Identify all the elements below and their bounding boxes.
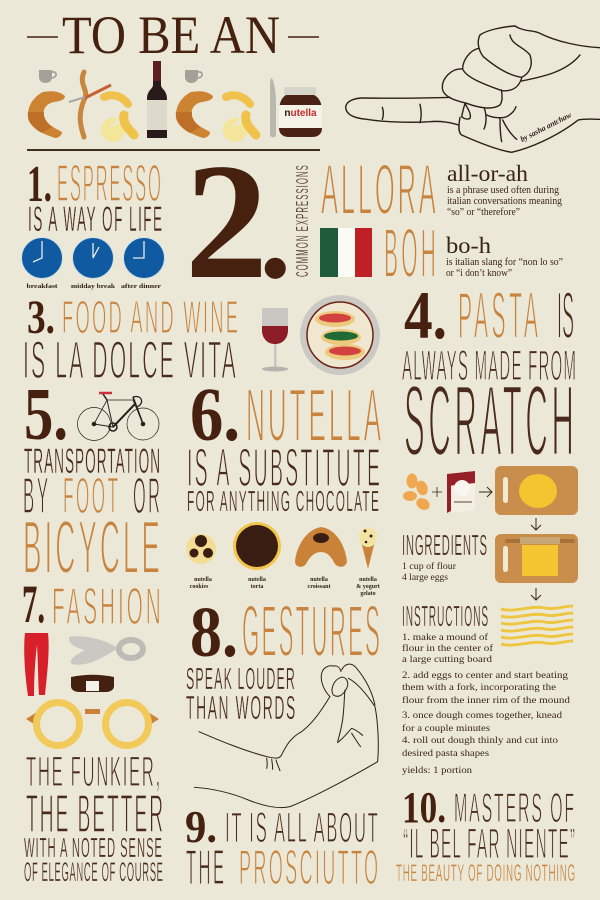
section 2: common expressions: is a phrase used often during bbox=[447, 185, 559, 196]
section 10: il bel far niente: “IL BEL FAR NIENTE” bbox=[403, 819, 575, 867]
icon: nutella torta bbox=[233, 522, 281, 570]
food row illustration: nutella bbox=[284, 108, 317, 119]
icon: cutting board with flour bbox=[495, 466, 578, 515]
icon: italian flag bbox=[320, 228, 372, 277]
section 2: common expressions: “so” or “therefore” bbox=[447, 207, 520, 218]
nutella labels: nutella bbox=[359, 577, 377, 583]
section 2: common expressions: ALLORA bbox=[321, 151, 436, 230]
nutella labels: gelato bbox=[360, 591, 376, 597]
clock labels: midday break bbox=[71, 284, 116, 290]
icon: nutella croissant bbox=[295, 527, 347, 567]
clock labels: after dinner bbox=[121, 284, 161, 290]
section 8: gestures: GESTURES bbox=[242, 593, 380, 672]
section 8: gestures: THAN WORDS bbox=[186, 690, 295, 727]
icon: pointing hand line drawing bbox=[346, 26, 600, 152]
section 8: gestures: 8. bbox=[190, 592, 238, 672]
instructions: desired pasta shapes bbox=[402, 749, 489, 759]
arrow: down to noodles bbox=[531, 588, 541, 600]
section 2: common expressions: BOH bbox=[384, 213, 436, 292]
section 2: common expressions: is italian slang for “non lo so” bbox=[446, 257, 563, 268]
section 6: nutella: 6. bbox=[190, 373, 240, 457]
section 6: nutella: IS A SUBSTITUTE bbox=[187, 437, 380, 498]
section 2: common expressions: COMMON EXPRESSIONS bbox=[291, 165, 312, 277]
section 7: fashion bbox=[22, 574, 163, 888]
nutella labels: nutella bbox=[194, 577, 212, 583]
section 3: food and wine bbox=[23, 291, 380, 390]
icon: wine glass bbox=[262, 308, 288, 372]
nutella labels: cookies bbox=[190, 584, 209, 590]
section 6: nutella: NUTELLA bbox=[246, 373, 381, 457]
icon: plus bbox=[432, 487, 442, 497]
section 5: transportation: BY bbox=[23, 469, 48, 525]
ingredients: 1 cup of flour bbox=[402, 561, 457, 572]
section 10: il bel far niente: 10. bbox=[402, 783, 446, 832]
section 2: common expressions: . bbox=[259, 162, 292, 306]
section 4: pasta: 4. bbox=[404, 277, 447, 353]
section 2: common expressions: or “i don’t know” bbox=[446, 268, 512, 279]
ingredients: INGREDIENTS bbox=[402, 529, 487, 562]
instructions: 3. once dough comes together, knead bbox=[402, 711, 562, 721]
icon: grey scarf bbox=[69, 636, 143, 665]
icon: cutting board with dough bbox=[495, 534, 578, 583]
instructions: yields: 1 portion bbox=[402, 766, 472, 776]
section 3: food and wine: FOOD AND WINE bbox=[62, 292, 238, 344]
instructions: 4. roll out dough thinly and cut into bbox=[402, 736, 558, 746]
section 2: common expressions: all-or-ah bbox=[447, 161, 529, 186]
section 7: fashion: THE BETTER bbox=[26, 783, 163, 844]
icon: yellow glasses bbox=[26, 702, 159, 746]
section 5: transportation: BICYCLE bbox=[23, 505, 160, 589]
nutella labels: nutella bbox=[310, 577, 328, 583]
icon: nutella cookies bbox=[186, 534, 216, 564]
ingredients: 4 large eggs bbox=[402, 573, 448, 583]
icon: noodles bbox=[501, 606, 573, 645]
section 5: transportation: OR bbox=[133, 469, 160, 525]
instructions: flour from the inner rim of the mound bbox=[402, 695, 570, 706]
instructions: 1. make a mound of bbox=[402, 632, 489, 643]
icon: flour bag bbox=[447, 471, 475, 513]
icon: after dinner clock bbox=[124, 238, 164, 278]
instructions: 2. add eggs to center and start beating bbox=[402, 671, 568, 681]
section 2: common expressions: bo-h bbox=[446, 233, 492, 258]
section 6: nutella: FOR ANYTHING CHOCOLATE bbox=[187, 485, 379, 518]
section 9: prosciutto: IT IS ALL ABOUT bbox=[225, 802, 378, 851]
section 9: prosciutto bbox=[185, 801, 378, 895]
food row illustration bbox=[28, 61, 322, 142]
instructions: for a couple minutes bbox=[402, 723, 490, 734]
section 9: prosciutto: 9. bbox=[185, 801, 217, 852]
section 1: espresso: IS A WAY OF LIFE bbox=[28, 199, 162, 239]
section 10: il bel far niente: MASTERS OF bbox=[454, 784, 574, 831]
instructions: them with a fork, incorporating the bbox=[402, 682, 556, 693]
section 9: prosciutto: THE bbox=[186, 840, 224, 895]
section 4: pasta bbox=[402, 277, 576, 477]
divider under the food row bbox=[27, 149, 320, 151]
section 8: gestures: SPEAK LOUDER bbox=[186, 663, 295, 697]
section 1: espresso: ESPRESSO bbox=[57, 155, 161, 213]
section 7: fashion: THE FUNKIER, bbox=[26, 746, 160, 795]
arrow: down to dough bbox=[531, 518, 541, 530]
nutella labels: croissant bbox=[308, 584, 330, 590]
section 4: pasta: IS bbox=[557, 279, 574, 353]
section 5: transportation: TRANSPORTATION bbox=[24, 441, 160, 481]
section 5: transportation bbox=[23, 374, 160, 589]
nutella labels bbox=[190, 577, 380, 597]
section 1: espresso bbox=[22, 155, 164, 290]
icon: bruschetta plate bbox=[300, 295, 380, 375]
section 4: pasta: ALWAYS MADE FROM bbox=[402, 341, 576, 389]
ingredients bbox=[402, 529, 487, 583]
icon: italian hand gesture line drawing bbox=[194, 664, 378, 808]
nutella labels: nutella bbox=[248, 577, 266, 583]
section 5: transportation: FOOT bbox=[63, 469, 118, 525]
section 7: fashion: OF ELEGANCE OF COURSE bbox=[24, 858, 163, 888]
section 4: pasta: PASTA bbox=[458, 280, 538, 353]
section 8: gestures bbox=[186, 592, 380, 808]
icon: watch bbox=[71, 675, 114, 692]
section 3: food and wine: 3. bbox=[27, 291, 55, 344]
icon: red pants bbox=[24, 633, 49, 696]
section 1: espresso: 1. bbox=[27, 156, 52, 213]
section 2: common expressions: 2 bbox=[185, 129, 268, 313]
icon: nutella gelato bbox=[359, 527, 377, 569]
section 5: transportation: 5. bbox=[24, 374, 68, 456]
section 4: pasta: SCRATCH bbox=[404, 364, 574, 477]
clock labels: breakfast bbox=[26, 284, 58, 290]
nutella labels: torta bbox=[251, 584, 263, 590]
icon: bicycle bbox=[78, 393, 159, 440]
clock labels bbox=[26, 284, 161, 290]
instructions: INSTRUCTIONS bbox=[402, 599, 488, 633]
section 7: fashion: WITH A NOTED SENSE bbox=[24, 832, 162, 864]
section 6: nutella bbox=[186, 373, 381, 597]
section 3: food and wine: IS LA DOLCE VITA bbox=[23, 329, 236, 390]
section 7: fashion: 7. bbox=[22, 574, 45, 634]
instructions bbox=[402, 599, 570, 776]
section 2: common expressions: italian conversations meaning bbox=[447, 196, 562, 207]
arrow: to cutting board bbox=[479, 487, 492, 497]
recipe step illustrations bbox=[403, 466, 578, 645]
section 7: fashion: FASHION bbox=[52, 578, 161, 636]
credit signature: by sasha antchaw bbox=[519, 110, 573, 144]
icon: midday clock bbox=[72, 238, 114, 278]
instructions: flour in the center of bbox=[402, 643, 494, 654]
icon: breakfast clock bbox=[22, 238, 62, 278]
section 2: common expressions bbox=[185, 129, 563, 313]
icon: eggs bbox=[403, 474, 432, 512]
section 10: il bel far niente bbox=[396, 783, 575, 886]
section 10: il bel far niente: THE BEAUTY OF DOING NOTHING bbox=[396, 859, 575, 886]
instructions: a large cutting board bbox=[402, 655, 492, 665]
title: TO BE AN bbox=[62, 5, 280, 65]
nutella labels: & yogurt bbox=[356, 584, 380, 590]
section 9: prosciutto: PROSCIUTTO bbox=[239, 840, 378, 895]
